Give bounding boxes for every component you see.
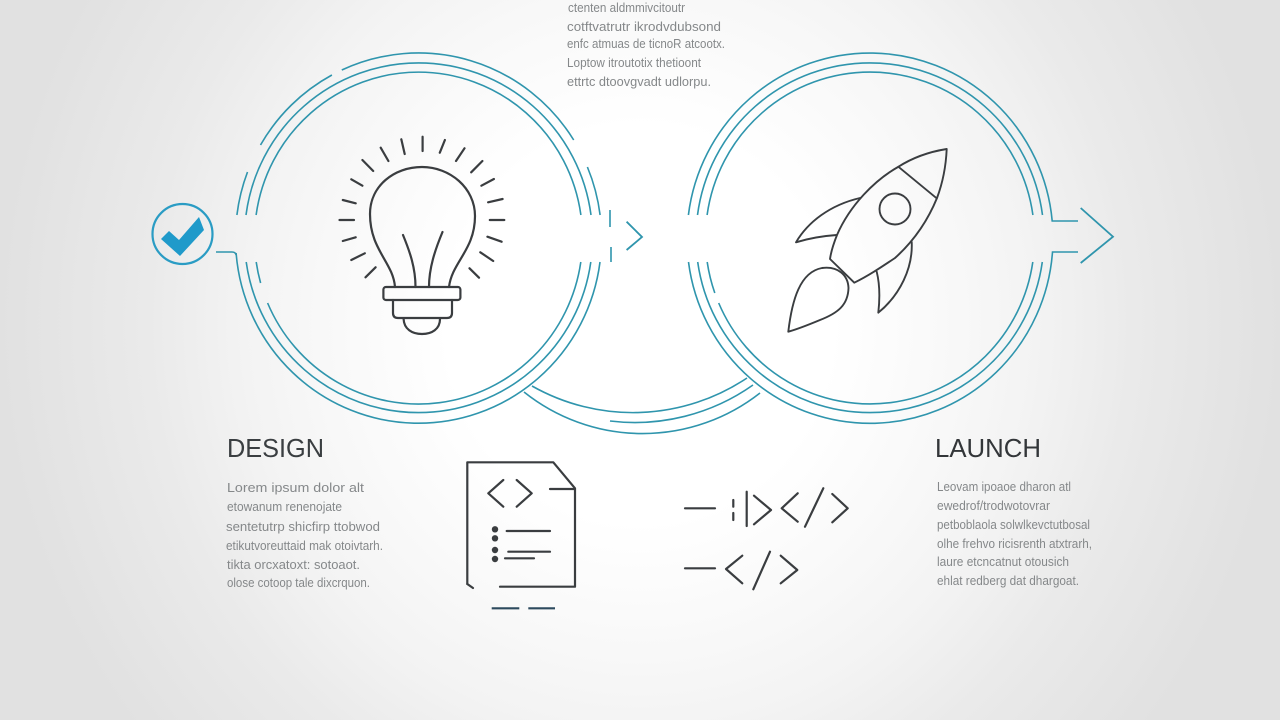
icon: code document	[467, 462, 575, 608]
icon: check mark badge	[152, 204, 212, 264]
text block: design description: etikutvoreuttaid mak otoivtarh.	[226, 539, 383, 553]
panel: design circle rings	[216, 53, 600, 423]
text block: launch description	[937, 480, 1092, 588]
arrow: launch output	[1081, 208, 1113, 263]
text block: top description: ctenten aldmmivcitoutr	[568, 1, 685, 15]
icon: rocket	[788, 149, 947, 332]
icon: code brackets row one	[685, 488, 848, 527]
text block: design description: sentetutrp shicfirp ttobwod	[226, 520, 380, 534]
text block: top description: enfc atmuas de ticnoR atcootx.	[567, 37, 725, 51]
text block: top description: cotftvatrutr ikrodvdubsond	[567, 20, 721, 34]
text block: launch description: Leovam ipoaoe dharon atl	[937, 480, 1071, 494]
icon: code brackets row two	[685, 552, 797, 589]
connector: arcs between the circles	[524, 378, 760, 434]
text block: top description: Loptow itroutotix thetioont	[567, 56, 701, 70]
text block: top description: ettrtc dtoovgvadt udlorpu.	[567, 75, 711, 89]
text block: design description: tikta orcxatoxt: sotoaot.	[227, 558, 360, 572]
icon: light bulb	[340, 137, 504, 334]
text block: launch description: laure etcncatnut otousich	[937, 555, 1069, 569]
heading: design: DESIGN	[227, 433, 324, 463]
text block: design description	[226, 481, 383, 590]
text block: launch description: ehlat redberg dat dhargoat.	[937, 574, 1079, 588]
arrow: first step	[610, 210, 642, 262]
text block: design description: olose cotoop tale dixcrquon.	[227, 576, 370, 590]
heading: launch: LAUNCH	[935, 433, 1041, 463]
text block: launch description: petboblaola solwlkevctutbosal	[937, 518, 1090, 532]
text block: design description: Lorem ipsum dolor alt	[227, 481, 365, 495]
text block: top description	[567, 1, 725, 89]
text block: launch description: ewedrof/trodwotovrar	[937, 499, 1050, 513]
text block: launch description: olhe frehvo ricisrenth atxtrarh,	[937, 537, 1092, 551]
text block: design description: etowanum renenojate	[227, 500, 342, 514]
panel: launch circle rings	[688, 53, 1078, 423]
